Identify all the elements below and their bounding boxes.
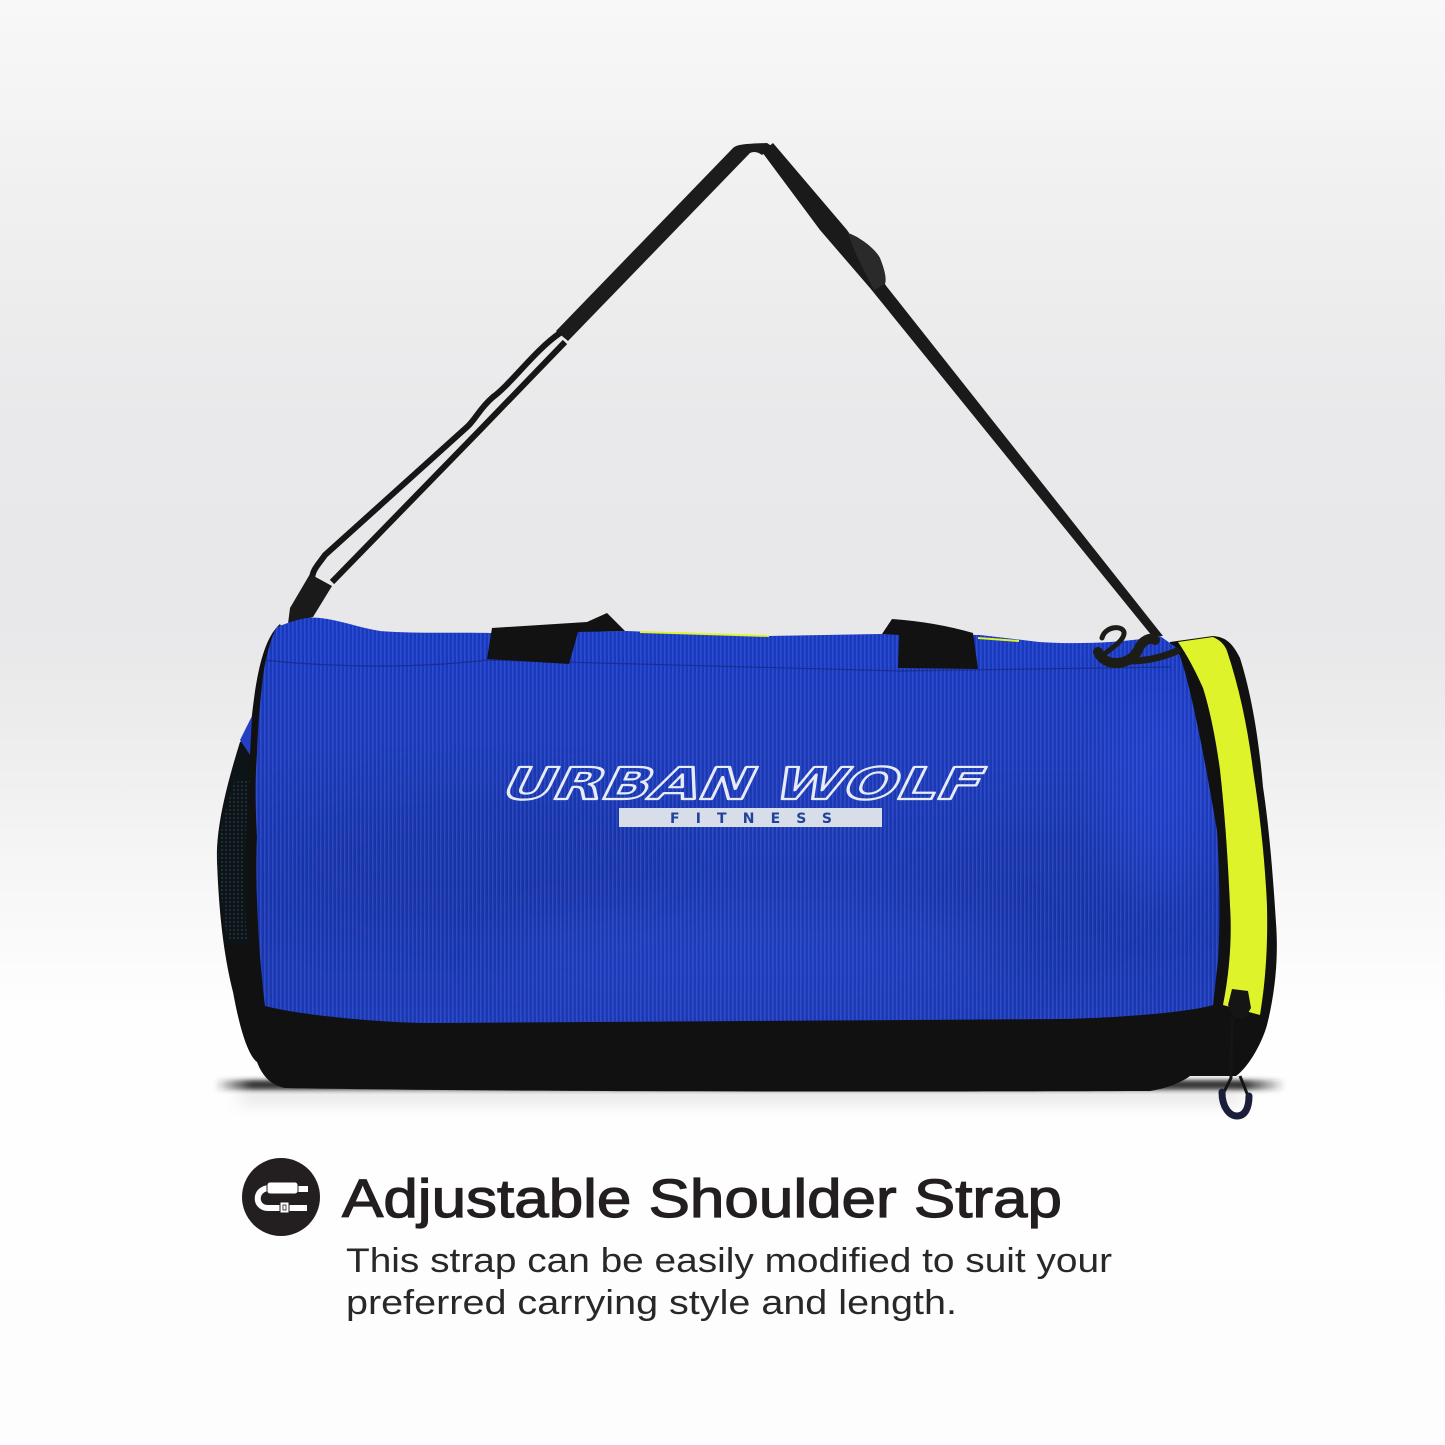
zipper pull and hook xyxy=(1222,989,1251,1116)
right carry handle xyxy=(882,619,978,669)
logo wordmark: URBAN WOLF xyxy=(493,758,996,809)
strap: slider buckle xyxy=(848,233,886,290)
shoulder strap xyxy=(288,143,1163,636)
neon yellow side panel xyxy=(1178,637,1267,1015)
bag body xyxy=(217,600,1277,1092)
strap: upper left band xyxy=(556,143,773,341)
ground shadow xyxy=(215,1080,1285,1102)
logo: URBAN WOLF FITNESS xyxy=(493,758,996,827)
strap: right band xyxy=(762,143,1163,636)
side mesh pocket xyxy=(217,716,252,945)
description text: preferred carrying style and length. xyxy=(346,1284,957,1322)
left carry handle xyxy=(487,613,625,664)
feature caption xyxy=(242,1158,1112,1322)
strap: left buckle xyxy=(288,574,332,624)
description text xyxy=(346,1242,1112,1322)
logo subtext: FITNESS xyxy=(670,811,832,827)
blue ribbed main panel xyxy=(240,600,1240,1030)
heading: Adjustable Shoulder Strap xyxy=(342,1169,1062,1229)
logo bar xyxy=(619,808,882,827)
strap: split left webbing xyxy=(312,333,565,582)
top yellow trim xyxy=(640,632,1019,641)
icon: adjustable strap xyxy=(242,1158,320,1236)
black silhouette xyxy=(217,624,1277,1092)
description text: This strap can be easily modified to suit your xyxy=(346,1242,1112,1280)
strap hook hardware xyxy=(1098,628,1177,663)
